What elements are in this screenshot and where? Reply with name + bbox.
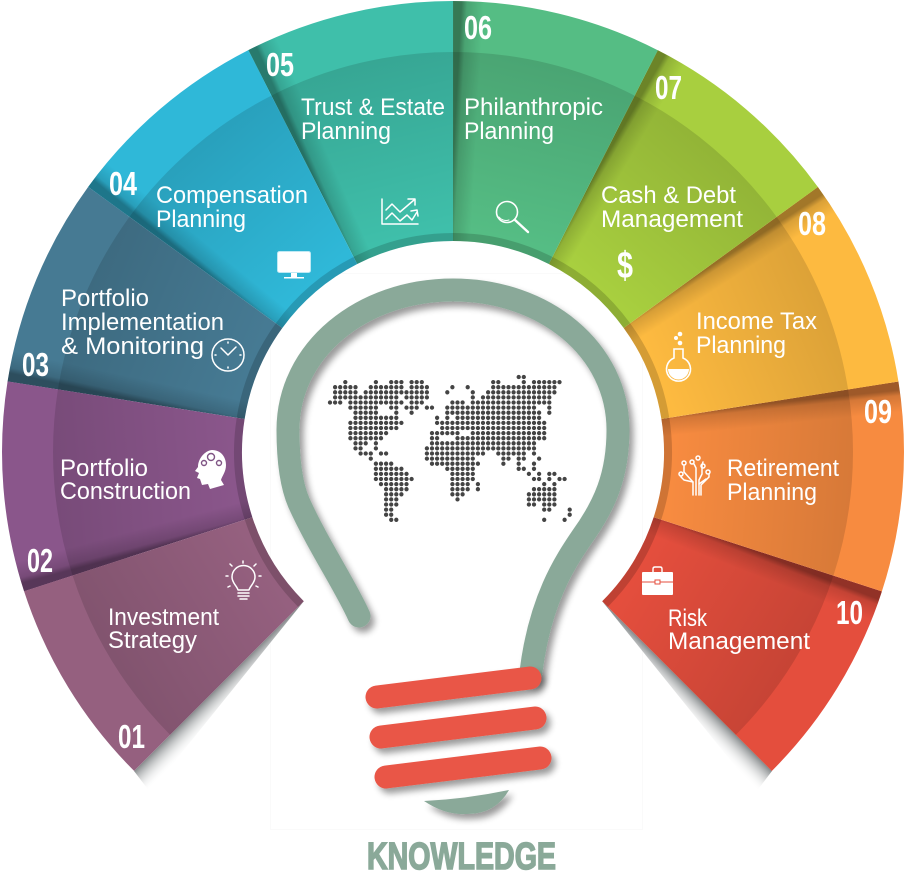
shadow under right end of the arc (602, 601, 772, 792)
label: Cash & Debt Management: Cash & Debt (601, 182, 736, 209)
label: Portfolio Construction (60, 455, 191, 505)
label: Philanthropic Planning: Philanthropic (464, 94, 603, 121)
panel 04: Compensation Planning (88, 50, 358, 328)
icon: dollar sign: $ (617, 245, 633, 287)
icon: line chart (382, 199, 418, 224)
label: Income Tax Planning: Planning (696, 332, 786, 359)
panel 02: Portfolio Construction (2, 381, 252, 592)
bulb outline (288, 290, 618, 672)
number 01: 01 (118, 718, 145, 755)
panel 06: Philanthropic Planning (453, 0, 658, 264)
panel 08: Income Tax Planning (624, 187, 898, 419)
label: Portfolio Construction: Construction (60, 478, 191, 505)
label: Retirement Planning: Retirement (727, 455, 839, 482)
label: Income Tax Planning: Income Tax (696, 308, 817, 335)
bulb screw bars (377, 678, 540, 777)
number 02: 02 (27, 542, 53, 579)
label: Philanthropic Planning: Planning (464, 118, 554, 145)
label: Trust & Estate Planning (301, 94, 445, 145)
shadow under left end of the arc (134, 601, 304, 792)
number 08: 08 (798, 205, 826, 242)
icon: head with gears (195, 450, 226, 489)
label: Portfolio Construction: Portfolio (60, 455, 148, 482)
number 06: 06 (464, 9, 492, 46)
icon: flask (666, 332, 691, 381)
icon: briefcase (642, 567, 673, 595)
number 03: 03 (22, 346, 49, 383)
icon: light bulb (226, 561, 261, 599)
label: Philanthropic Planning (464, 94, 603, 145)
light bulb (288, 290, 618, 814)
label: Retirement Planning (727, 455, 839, 506)
icon: clock (212, 339, 244, 371)
icon: circuit tree (679, 456, 710, 495)
panel 09: Retirement Planning (654, 382, 904, 592)
label: Compensation Planning: Planning (156, 206, 246, 233)
number 10: 10 (836, 594, 863, 631)
label: Risk Management (668, 605, 810, 655)
label: Retirement Planning: Planning (727, 479, 817, 506)
label: Compensation Planning: Compensation (156, 182, 308, 209)
panel 03: Portfolio Implementation & Monitoring (8, 187, 282, 419)
label: Cash & Debt Management: Management (601, 206, 743, 233)
label: Portfolio Implementation & Monitoring (61, 285, 224, 360)
label: Investment Strategy (108, 604, 219, 654)
panel 07: Cash & Debt Management (548, 50, 818, 328)
label: Compensation Planning (156, 182, 308, 233)
label: Investment Strategy: Investment (108, 604, 219, 631)
label: Risk Management: Management (668, 628, 810, 655)
panel 10: Risk Management (602, 517, 882, 771)
label: Cash & Debt Management (601, 182, 743, 233)
label: Risk Management: Risk (668, 605, 708, 632)
number 04: 04 (109, 165, 137, 202)
icon: monitor (278, 252, 310, 278)
label: Portfolio Implementation & Monitoring: Implementation (61, 309, 224, 336)
panel 01: Investment Strategy (0, 440, 320, 771)
number 05: 05 (266, 46, 294, 83)
label: Trust & Estate Planning: Trust & Estate (301, 94, 445, 121)
icon: magnifier (496, 202, 528, 232)
panel 05: Trust & Estate Planning (248, 1, 454, 264)
label: Investment Strategy: Strategy (108, 627, 197, 654)
number 09: 09 (864, 393, 892, 430)
label: Income Tax Planning (696, 308, 817, 359)
number 07: 07 (655, 69, 682, 106)
label: Trust & Estate Planning: Planning (301, 118, 391, 145)
label: Portfolio Implementation & Monitoring: Portfolio (61, 285, 149, 312)
label: Portfolio Implementation & Monitoring: & Monitoring (61, 333, 204, 360)
bulb base (424, 790, 509, 814)
world map dots (330, 377, 570, 520)
